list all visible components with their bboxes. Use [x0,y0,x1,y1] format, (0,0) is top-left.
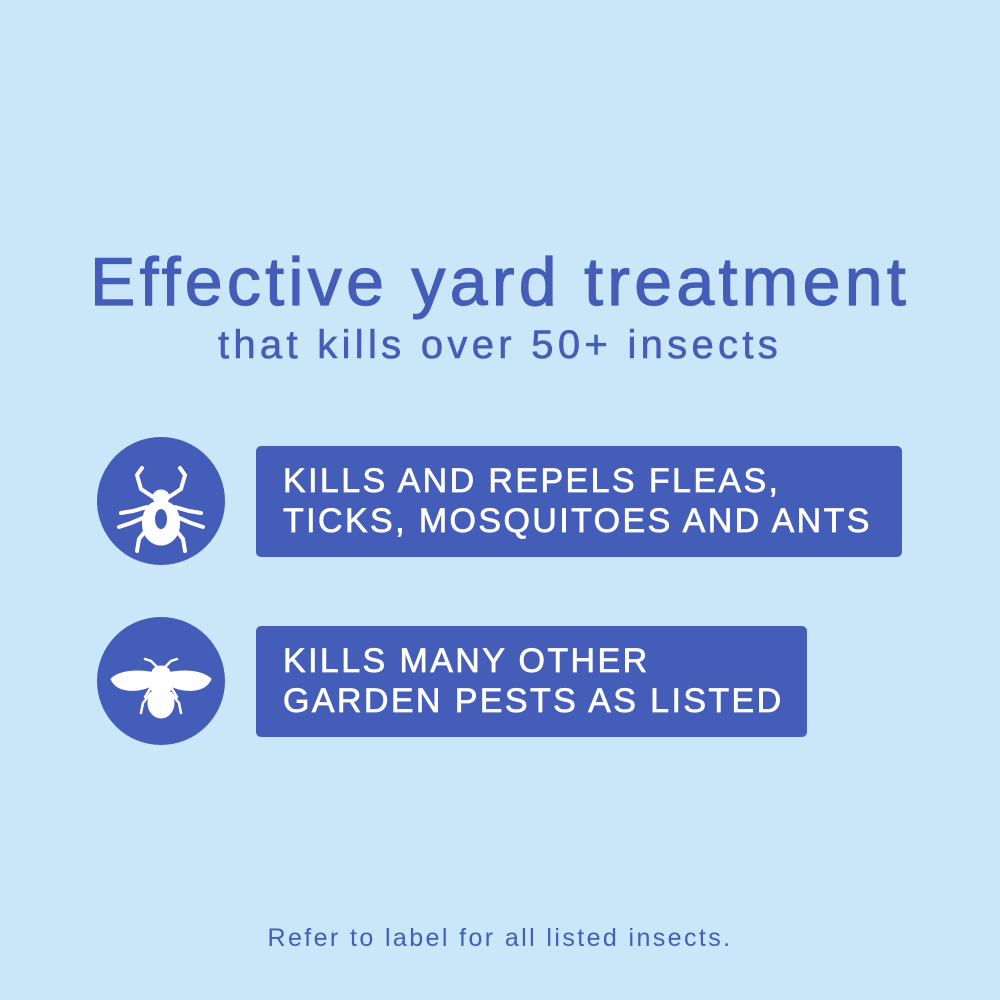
panel: fleas ticks: TICKS, MOSQUITOES AND ANTS [283,502,872,540]
panel: garden pests: KILLS MANY OTHER [283,642,650,680]
subtitle: that kills over 50+ insects [218,323,782,367]
panel: fleas ticks: KILLS AND REPELS FLEAS, [283,462,780,500]
panel: garden pests: GARDEN PESTS AS LISTED [283,682,784,720]
icon: tick [97,437,225,565]
footnote: Refer to label for all listed insects. [268,924,732,952]
panel: fleas ticks [256,446,902,557]
panel: garden pests [256,626,807,737]
icon: bee [97,617,225,745]
title: Effective yard treatment [90,244,910,320]
